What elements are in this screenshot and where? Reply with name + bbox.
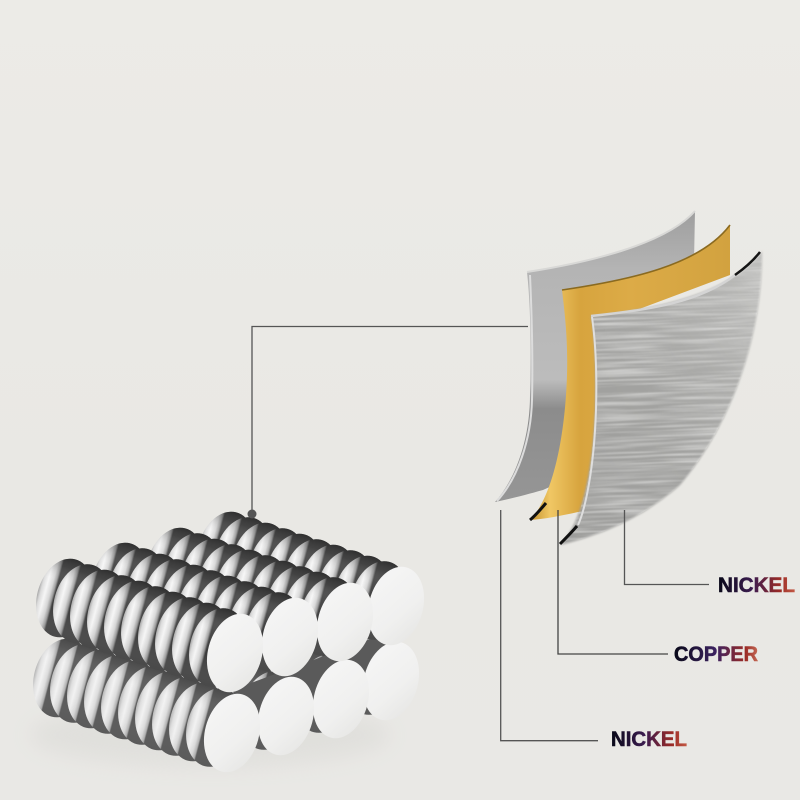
label: nickel inner: NICKEL xyxy=(611,728,687,751)
leader line from sheets to magnets with dot xyxy=(248,326,528,518)
leader line: outer nickel xyxy=(624,510,709,584)
magnet stack: stacked disc magnets in two layers xyxy=(25,505,432,779)
label: copper: COPPER xyxy=(674,643,758,666)
sheet: back nickel layer xyxy=(495,211,695,502)
label: nickel outer: NICKEL xyxy=(718,574,795,597)
bottom layer of magnets xyxy=(25,580,427,779)
leader line: copper xyxy=(558,510,668,654)
sheet: copper layer xyxy=(530,225,730,520)
sheet: front nickel layer xyxy=(559,251,763,546)
layered plating sheets xyxy=(495,211,775,553)
top layer of magnets xyxy=(28,505,432,699)
leader line: inner nickel xyxy=(501,510,598,741)
